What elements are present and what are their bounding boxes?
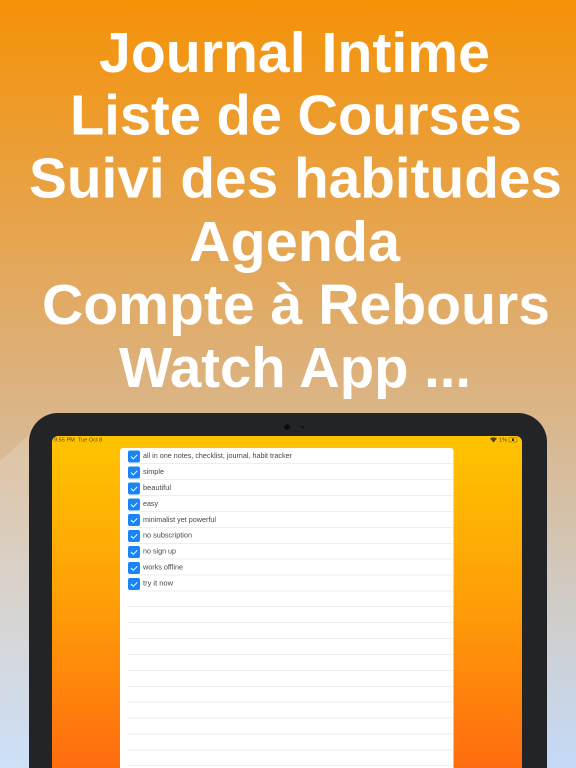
item text: simple [143, 467, 164, 476]
item text: no sign up [143, 546, 176, 556]
item text: minimalist yet powerful [143, 515, 216, 524]
status bar right: 1% [499, 438, 507, 444]
checkbox: no subscription [128, 530, 140, 542]
title [29, 21, 562, 400]
checkbox: minimalist [128, 514, 140, 526]
checkbox: all in one [128, 450, 140, 462]
item text: try it now [143, 578, 174, 588]
item text: all in one notes, checklist, journal, habit tracker [143, 451, 293, 460]
item text: easy [143, 499, 158, 508]
title: Compte à Rebours [42, 273, 550, 337]
title: Agenda [189, 210, 401, 274]
checkbox: no sign up [128, 546, 140, 558]
status bar right [490, 437, 517, 444]
checkbox: try it now [128, 578, 140, 590]
item text: works offline [142, 562, 183, 572]
checkbox: simple [128, 466, 140, 478]
item text: no subscription [143, 530, 192, 540]
item text: beautiful [143, 483, 171, 492]
checkbox: easy [128, 498, 140, 510]
background light diagonal facet [0, 425, 40, 768]
rule lines [127, 463, 453, 766]
front camera [284, 424, 304, 430]
checklist panel [120, 448, 454, 768]
title: Watch App ... [119, 336, 471, 400]
title: Journal Intime [99, 21, 490, 85]
checkbox: beautiful [128, 482, 140, 494]
tablet device [29, 413, 547, 768]
tablet screen [52, 436, 522, 768]
status bar left: 9:55 PM Tue Oct 8 [54, 438, 102, 444]
tablet bezel [29, 413, 547, 768]
checkbox: works offline [128, 562, 140, 574]
title: Liste de Courses [70, 84, 522, 148]
title: Suivi des habitudes [29, 146, 562, 210]
